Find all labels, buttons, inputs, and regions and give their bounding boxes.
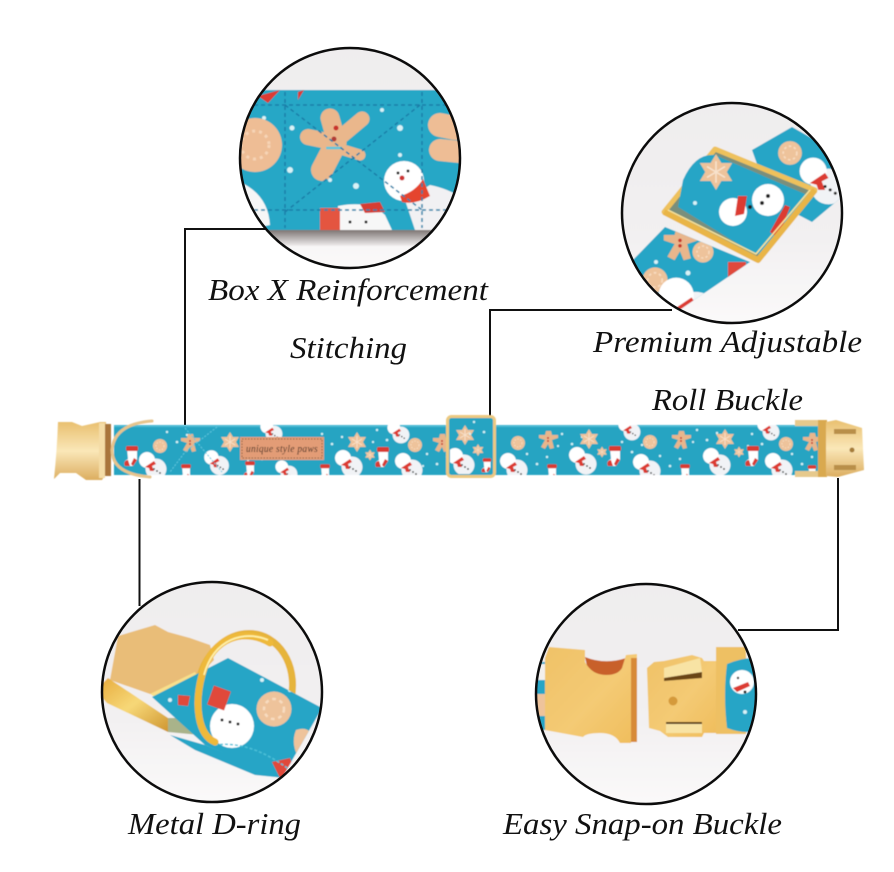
- circle: snap-on buckle detail: [531, 580, 762, 810]
- left fabric: [537, 662, 546, 730]
- male collar block: [716, 647, 746, 734]
- buckle back edge: [661, 146, 818, 214]
- brand label patch: unique style paws: [246, 444, 318, 455]
- orange buckle interior: [584, 656, 626, 676]
- connector line: snap buckle: [738, 478, 838, 630]
- right cookie man: [440, 125, 460, 152]
- caption: box X reinforcement: Box X Reinforcement: [208, 272, 489, 307]
- connector line: stitching: [185, 229, 268, 425]
- upper strap: [752, 126, 840, 222]
- connector line: D-ring: [138, 479, 140, 606]
- lower strap: [634, 226, 750, 310]
- left snowman: [244, 183, 271, 227]
- D-ring back: [197, 630, 297, 694]
- circle: box X stitching detail: [238, 46, 462, 270]
- gingerbread man: [308, 118, 362, 170]
- box X stitching: [254, 92, 446, 228]
- circle: metal D-ring detail: [96, 577, 327, 807]
- strap with pattern: [113, 424, 819, 476]
- gold buckle body: [110, 625, 214, 694]
- D-ring front arc: [198, 636, 270, 742]
- rolled strap: [678, 155, 812, 256]
- fabric: [150, 655, 325, 780]
- right snowman: [405, 184, 454, 231]
- caption: easy snap-on buckle: Easy Snap-on Buckle: [502, 806, 782, 841]
- sliding buckle: [447, 416, 495, 476]
- bottom stocking and snowman: [338, 204, 392, 230]
- connector line: roll buckle: [490, 310, 672, 416]
- buckle front bar: [664, 190, 815, 260]
- fabric underside: [170, 735, 285, 778]
- right fabric: [724, 658, 755, 733]
- right snap buckle: [795, 420, 864, 477]
- caption: roll buckle: Roll Buckle: [651, 382, 803, 417]
- buckle shadow interior: [668, 152, 810, 257]
- caption: premium adjustable: Premium Adjustable: [592, 324, 862, 359]
- left snap buckle: [54, 422, 111, 480]
- brand label patch: [240, 437, 324, 460]
- female buckle: [545, 647, 637, 743]
- collar: [54, 416, 864, 482]
- caption: stitching: Stitching: [290, 330, 407, 365]
- male buckle: [647, 655, 716, 737]
- circle: roll buckle detail: [620, 102, 844, 324]
- cookie: [241, 117, 283, 173]
- metal D-ring: [112, 421, 152, 477]
- caption: metal D-ring: Metal D-ring: [127, 806, 301, 841]
